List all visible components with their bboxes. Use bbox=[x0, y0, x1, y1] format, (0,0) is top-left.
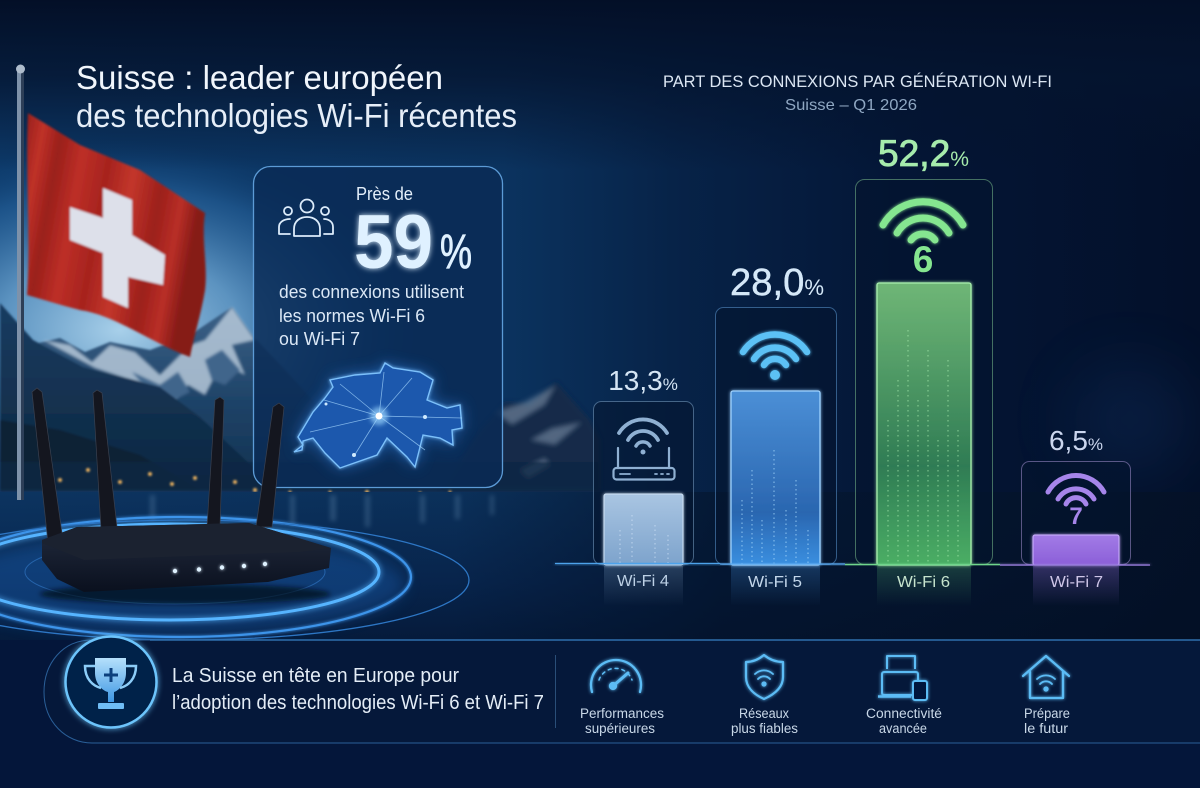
category: Wi-Fi 5: Wi-Fi 5 bbox=[748, 574, 802, 591]
Swiss flag bbox=[27, 113, 206, 357]
icon: wifi 5 bbox=[743, 334, 807, 380]
stat description: les normes Wi-Fi 6 bbox=[279, 305, 425, 326]
chart baseline bbox=[555, 564, 1150, 565]
chart heading bbox=[663, 72, 1052, 114]
router leds bbox=[173, 562, 267, 573]
lake bbox=[0, 492, 1200, 642]
stat description: ou Wi-Fi 7 bbox=[279, 328, 360, 349]
bar chart bbox=[555, 133, 1150, 606]
map: Switzerland network bbox=[294, 363, 462, 468]
wifi 7 numeral: 7 bbox=[1069, 503, 1083, 530]
benefit: reliable networks: Réseaux bbox=[739, 706, 789, 721]
benefit: performance bbox=[580, 660, 664, 736]
value: 52,2 %: 52,2% bbox=[878, 133, 969, 174]
benefit: future ready: Prépare bbox=[1024, 706, 1070, 721]
router bbox=[32, 388, 331, 604]
chart heading: PART DES CONNEXIONS PAR GÉNÉRATION WI-FI bbox=[663, 72, 1052, 91]
icon: people bbox=[279, 200, 333, 236]
stat intro: Près de bbox=[356, 183, 413, 204]
icon: wifi 6 bbox=[883, 202, 963, 240]
category: Wi-Fi 7: Wi-Fi 7 bbox=[1050, 574, 1103, 591]
benefit: reliable networks bbox=[731, 655, 798, 736]
icon: trophy bbox=[66, 636, 156, 728]
router antennas bbox=[32, 388, 284, 543]
leadership statement bbox=[172, 664, 544, 714]
chart heading: Suisse – Q1 2026 bbox=[785, 97, 917, 114]
bottom band bbox=[0, 636, 1200, 788]
stat percent sign: % bbox=[440, 226, 472, 279]
stat description bbox=[279, 281, 464, 349]
stat panel bbox=[254, 166, 502, 488]
value: 28,0 %: 28,0% bbox=[730, 262, 824, 304]
leadership statement: l’adoption des technologies Wi-Fi 6 et Wi-Fi 7 bbox=[172, 691, 544, 714]
benefit: advanced connectivity: avancée bbox=[879, 721, 927, 736]
value: 13,3 %: 13,3% bbox=[608, 365, 678, 396]
benefit: advanced connectivity bbox=[866, 656, 942, 736]
leadership statement: La Suisse en tête en Europe pour bbox=[172, 664, 459, 687]
benefit: advanced connectivity: Connectivité bbox=[866, 706, 942, 721]
benefit: performance: Performances bbox=[580, 706, 664, 721]
title bbox=[76, 60, 517, 135]
bar: Wi-Fi 6 bbox=[856, 133, 992, 606]
category: Wi-Fi 4: Wi-Fi 4 bbox=[617, 573, 669, 590]
flag pole bbox=[16, 64, 25, 500]
mountains bbox=[0, 303, 600, 492]
town lights bbox=[58, 468, 452, 494]
title: des technologies Wi-Fi récentes bbox=[76, 98, 517, 135]
bar: Wi-Fi 5 bbox=[716, 262, 836, 606]
wifi rings bbox=[0, 517, 469, 640]
icon: router with wifi bbox=[614, 419, 674, 480]
benefit: future ready bbox=[1023, 656, 1070, 736]
benefit: reliable networks: plus fiables bbox=[731, 721, 798, 736]
benefit: future ready: le futur bbox=[1024, 721, 1069, 736]
stat description: des connexions utilisent bbox=[279, 281, 464, 302]
bar: Wi-Fi 7 bbox=[1022, 425, 1130, 606]
value: 6,5 %: 6,5% bbox=[1049, 425, 1103, 456]
title: Suisse : leader européen bbox=[76, 60, 443, 97]
icon: wifi 7 bbox=[1048, 475, 1104, 504]
stat value: 59 bbox=[354, 200, 433, 285]
flag cross bbox=[70, 188, 165, 308]
category: Wi-Fi 6: Wi-Fi 6 bbox=[897, 574, 950, 591]
wifi 6 numeral: 6 bbox=[913, 239, 933, 280]
benefit: performance: supérieures bbox=[585, 721, 655, 736]
router body bbox=[42, 523, 331, 592]
bar: Wi-Fi 4 bbox=[594, 365, 694, 606]
